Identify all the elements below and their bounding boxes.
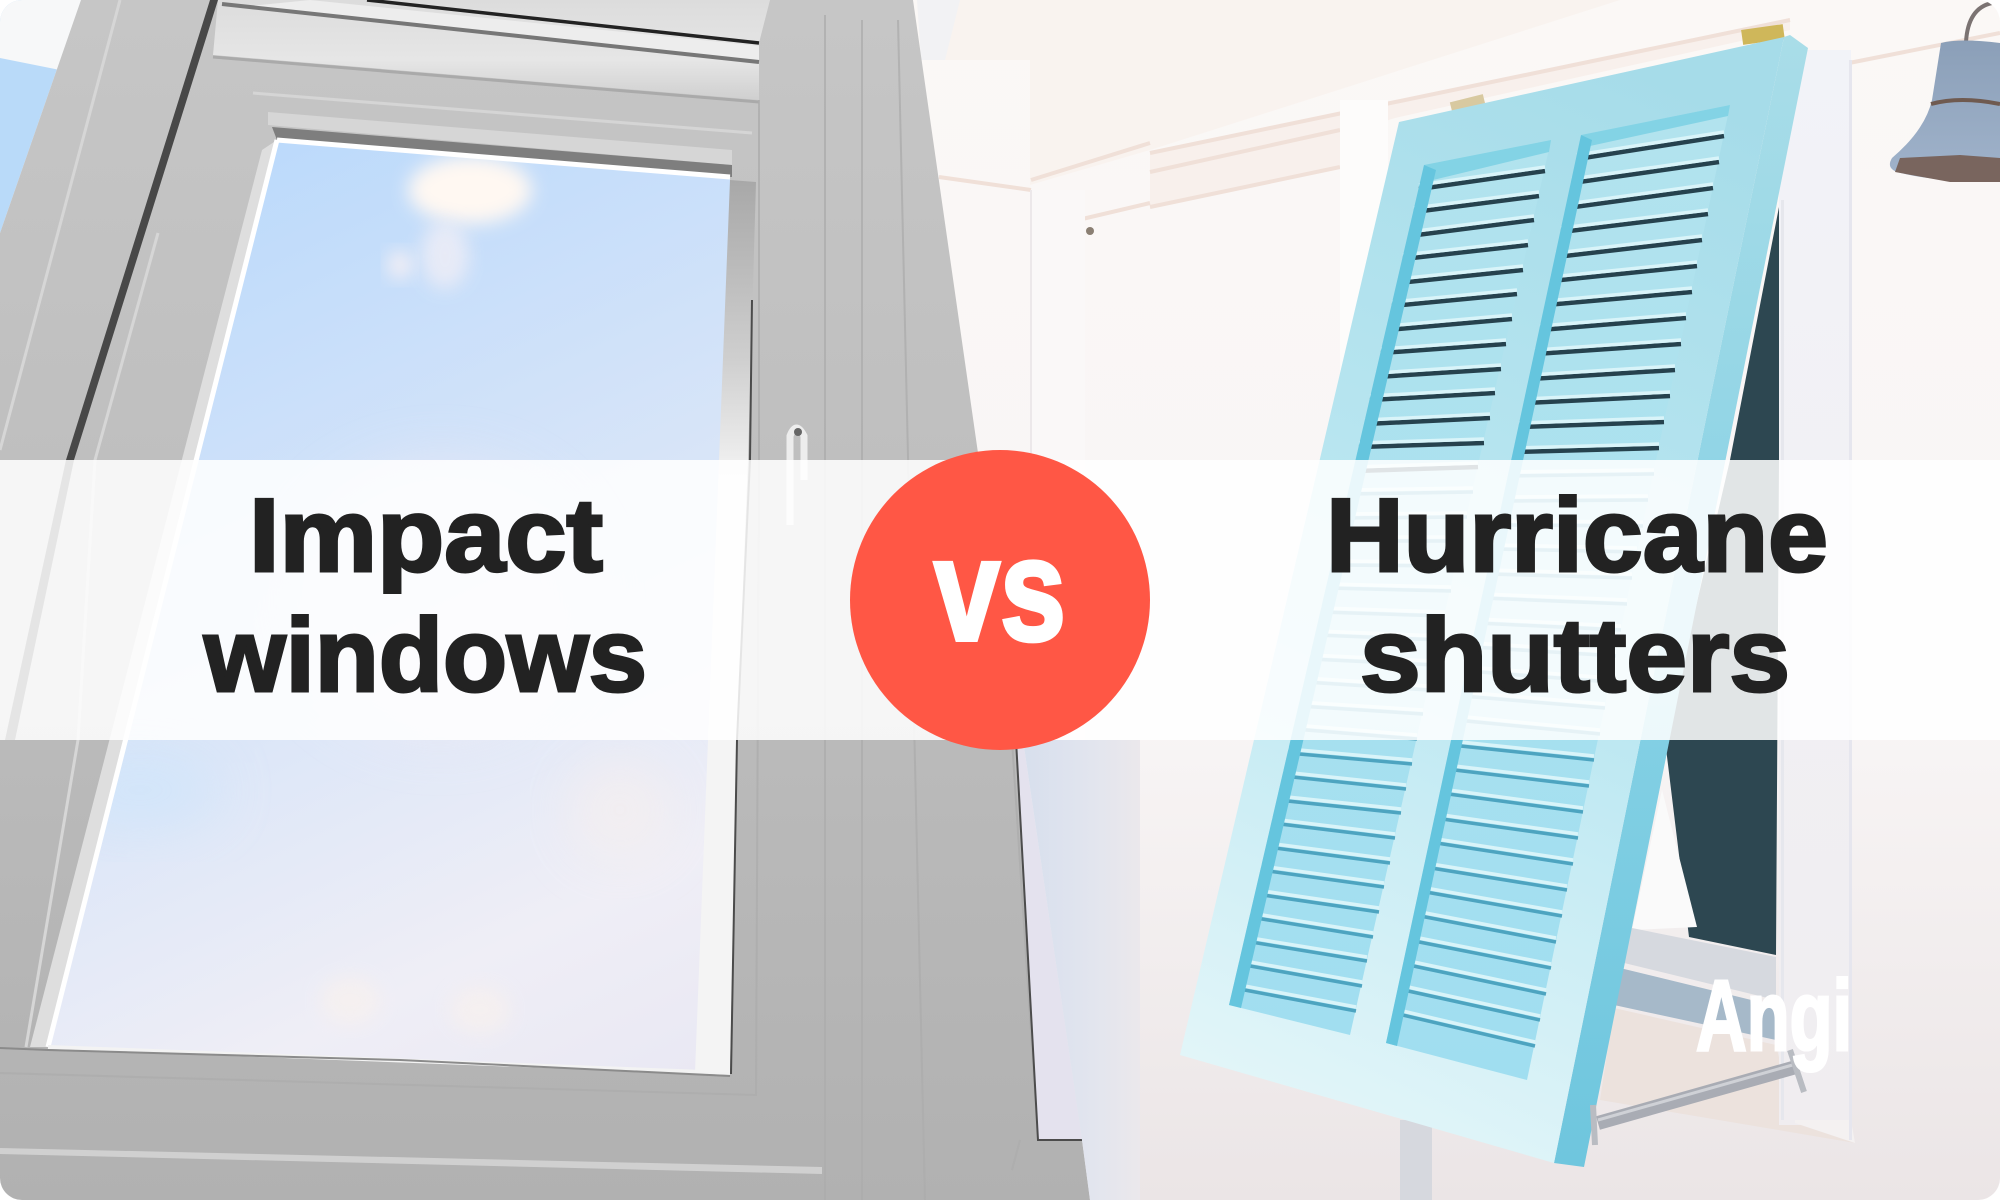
left louvre shadows upper — [1354, 171, 1545, 471]
shutter front face — [1180, 37, 1784, 1163]
panel: impact window photo — [0, 0, 1140, 1200]
heading: hurricane shutters — [1332, 494, 1826, 694]
left louvre stile strip — [1229, 165, 1436, 1008]
logo: Angi: Angi — [1696, 960, 1852, 1072]
frame head — [213, 0, 770, 177]
support rod — [1593, 1050, 1804, 1145]
white sash strip — [695, 180, 756, 1072]
wall corner top left — [0, 0, 81, 70]
light strip beside glass — [30, 140, 277, 1047]
dark gasket line — [5, 0, 218, 740]
badge: vs circle — [850, 450, 1150, 750]
sky glass — [48, 140, 730, 1072]
small glass pane — [1016, 740, 1082, 1140]
heading: impact windows — [202, 498, 644, 694]
heading: hurricane shutters: Hurricane — [1326, 478, 1828, 594]
clouds in glass — [60, 156, 670, 1034]
left louvre panel — [1229, 140, 1551, 1035]
badge: vs circle: vs — [934, 508, 1066, 671]
right louvre shadows lower — [1394, 474, 1654, 1046]
heading: impact windows: windows — [203, 598, 647, 714]
left louvre shadows lower — [1234, 492, 1473, 1011]
right louvre panel — [1386, 105, 1730, 1080]
white band behind headings — [0, 460, 2000, 740]
panel: window opening behind shutter — [1600, 50, 1855, 1143]
heading: impact windows: Impact — [249, 478, 603, 594]
hinges — [1450, 24, 1785, 115]
shutter side face — [1554, 35, 1808, 1167]
panel: hurricane shutter wall background — [900, 0, 2000, 1200]
heading: hurricane shutters: shutters — [1360, 598, 1790, 714]
grey window frame — [0, 0, 1090, 1200]
handle screw — [794, 428, 802, 436]
sky beyond left frame — [0, 0, 57, 232]
right louvre stile strip — [1386, 135, 1592, 1046]
window handle — [786, 424, 808, 460]
left louvre highlights — [1234, 167, 1545, 1007]
right louvre shadows upper — [1514, 136, 1724, 452]
wall edge overlap — [1023, 740, 1140, 1200]
glass edges — [48, 140, 730, 1047]
sill highlight — [0, 1148, 822, 1174]
right louvre highlights — [1394, 132, 1724, 1042]
icon: wall lamp — [1890, 3, 2000, 182]
panel: hurricane shutter — [1180, 24, 1808, 1167]
frame trim lines — [756, 15, 1024, 938]
